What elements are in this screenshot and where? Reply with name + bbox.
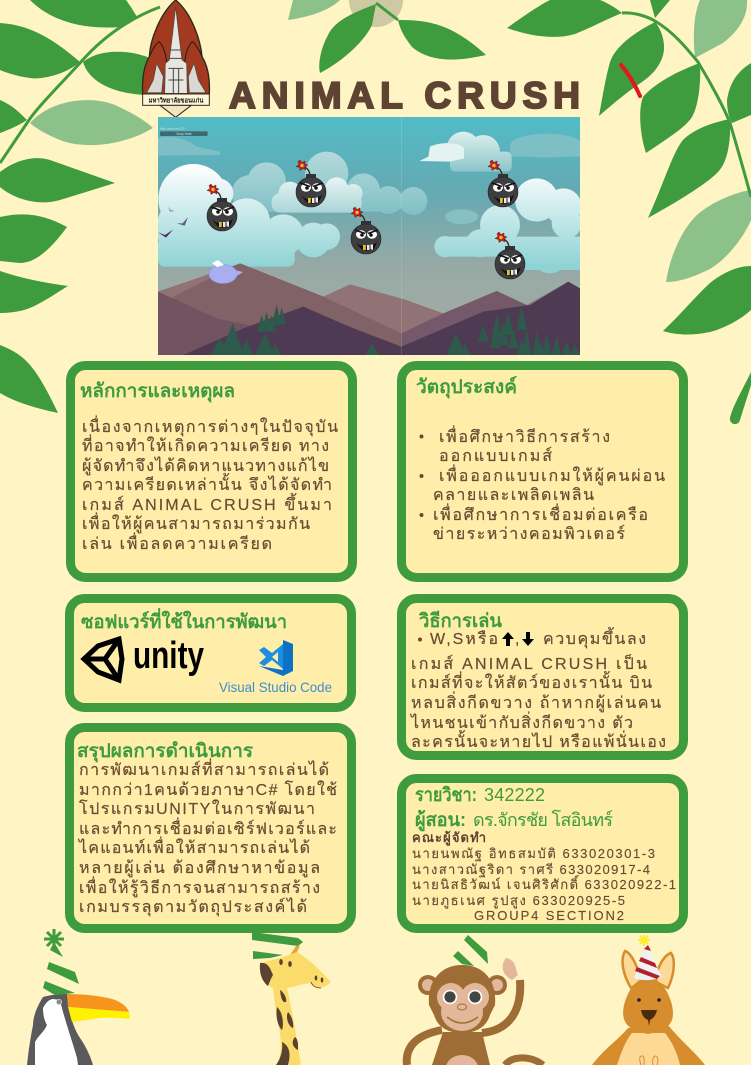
panel: rationale: เพื่อให้ผู้คนสามารถมาร่วมกัน	[82, 512, 310, 534]
birds	[158, 206, 188, 238]
panel: objectives: เพื่อออกแบบเกมให้ผู้คนผ่อน	[439, 464, 665, 486]
panel: summary: มากกว่า1คนด้วยภาษาC# โดยใช้	[79, 780, 337, 799]
panel: rationale: เกมส์ ANIMAL CRUSH ขึ้นมา	[82, 493, 332, 514]
icon: unity logo	[84, 635, 204, 680]
panel: course and team: 342222	[484, 785, 545, 805]
panel: how to play: เกมส์ที่จะให้สัตว์ของเรานั้น บิน	[411, 671, 652, 692]
animal: toucan	[27, 929, 130, 1065]
panel: how to play: ไหนชนเข้ากับสิ่งกีดขวาง ตัว	[409, 711, 633, 732]
panel: rationale: เนื่องจากเหตุการต่างๆในปัจจุบัน	[82, 415, 338, 437]
game screenshot	[157, 117, 583, 355]
panel: course and team: นายนพณัฐ อิทธสมบัติ 633020301-3	[412, 846, 655, 862]
panel: objectives: คลายและเพลิดเพลิน	[433, 487, 594, 504]
panel: how to play: หลบสิ่งกีดขวาง ถ้าหากผู้เล่นคน	[411, 691, 661, 713]
panel: how to play: ,	[515, 631, 519, 648]
panel: how to play: ควบคุมขึ้นลง	[543, 627, 646, 649]
panel: course and team: คณะผู้จัดทำ	[412, 830, 486, 846]
panel: rationale	[70, 366, 352, 578]
panel: summary: โปรแกรมUNITYในการพัฒนา	[79, 799, 315, 818]
foliage: right branch	[507, 0, 751, 424]
panel: summary: การพัฒนาเกมส์ที่สามารถเล่นได้	[79, 758, 329, 779]
panel: course and team: รายวิชา:	[415, 785, 477, 806]
panel: how to play: ละครนั้นจะหายไป หรือแพ้นั่นเอง	[411, 730, 666, 751]
panel: summary: และทำการเชื่อมต่อเซิร์ฟเวอร์และ	[79, 817, 337, 838]
panel: how to play: เกมส์ ANIMAL CRUSH เป็น	[411, 653, 647, 673]
UI bar	[160, 131, 208, 136]
game screenshot: Wait: setting via KCP	[160, 126, 185, 130]
panel: how to play: วิธีการเล่น	[419, 610, 502, 632]
clouds	[157, 132, 583, 273]
panel: rationale: ที่อาจทำให้เกิดความเครียด ทาง	[82, 434, 329, 455]
panel: objectives: วัตถุประสงค์	[416, 376, 517, 399]
icon: down arrow	[522, 632, 534, 646]
icon: unity logo: unity	[133, 635, 204, 677]
foliage: top-centre sprig	[288, 0, 486, 73]
game title: ANIMAL CRUSH	[229, 75, 580, 116]
game screenshot: Drop Host	[177, 132, 192, 136]
animal: giraffe	[252, 932, 331, 1065]
panel: course and team: นายนิสธิวัฒน์ เจนศิริศักดิ์ 633020922-1	[412, 875, 676, 892]
icon: visual studio code logo: Visual Studio Code	[219, 679, 332, 695]
panel: objectives: เพื่อศึกษาวิธีการสร้าง	[439, 425, 610, 446]
panel: software: ซอฟแวร์ที่ใช้ในการพัฒนา	[81, 608, 287, 633]
panel: course and team: ผู้สอน:	[415, 809, 466, 832]
panel: course and team: ดร.จักรชัย โสอินทร์	[473, 809, 613, 830]
animal: monkey	[407, 935, 543, 1065]
foliage: top-left branch	[0, 0, 160, 413]
panel: course and team: นายภูธเนศ รูปสูง 633020925-5	[412, 893, 625, 909]
panel: rationale: เล่น เพื่อลดความเครียด	[82, 532, 272, 553]
panel: summary: หลายผู้เล่น ต้องศึกษาหาข้อมูล	[79, 859, 320, 878]
panel: objectives: ข่ายระหว่างคอมพิวเตอร์	[433, 524, 625, 543]
panel: course and team: GROUP4 SECTION2	[474, 908, 624, 923]
panel: rationale: หลักการและเหตุผล	[80, 381, 235, 403]
mountains	[158, 263, 580, 355]
red mark on leaf	[621, 65, 640, 96]
animal: kangaroo	[592, 935, 705, 1065]
panel: rationale: ผู้จัดทำจึงได้คิดหาแนวทางแก้ไข	[82, 456, 329, 476]
panel: summary: เกมบรรลุตามวัตถุประสงค์ได้	[79, 897, 307, 917]
icon: up arrow	[502, 632, 514, 646]
panel: summary	[70, 728, 352, 928]
panel: software	[70, 598, 352, 708]
panel: course and team: นางสาวณัฐริดา ราศรี 633020917-4	[412, 862, 650, 878]
panel: summary: สรุปผลการดำเนินการ	[77, 741, 254, 763]
bombs	[207, 160, 525, 279]
trees	[211, 305, 580, 355]
panel: objectives	[402, 366, 684, 578]
panel: summary: ไคแอนท์เพื่อให้สามารถเล่นได้	[77, 836, 310, 857]
panel: course and team	[402, 778, 684, 928]
panel: objectives: เพื่อศึกษาการเชื่อมต่อเครือ	[433, 503, 648, 524]
panel: how to play: W,Sหรือ	[430, 630, 498, 648]
panel: objectives: ออกแบบเกมส์	[439, 446, 552, 465]
panel: summary: เพื่อให้รู้วิธีการจนสามารถสร้าง	[79, 876, 320, 898]
bird character	[209, 260, 243, 284]
panel: rationale: ความเครียดเหล่านั้น จึงได้จัดทำ	[82, 473, 332, 494]
university logo	[143, 0, 209, 117]
panel: how to play	[402, 598, 684, 756]
centre seam	[401, 117, 402, 355]
university logo: มหาวิทยาลัยขอนแก่น	[149, 96, 204, 104]
icon: visual studio code logo	[219, 640, 332, 695]
